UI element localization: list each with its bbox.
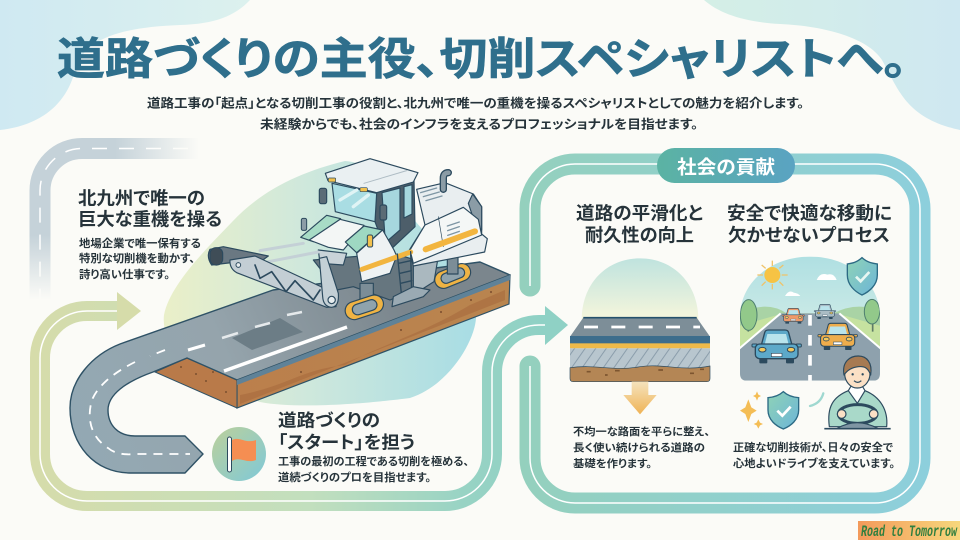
text block: heavy machine	[78, 188, 222, 281]
heading: smoothing and durability: 道路の平滑化と	[576, 202, 703, 224]
heading: safe and comfortable travel	[727, 204, 892, 246]
orange stripe front	[362, 252, 411, 269]
heading pill: 社会の貢献	[677, 156, 775, 178]
text block: start of road building: 道続づくりのプロを目指せます。	[278, 471, 431, 484]
text block: smoothing	[573, 425, 710, 470]
undercarriage	[313, 253, 427, 300]
background blob: top left	[0, 0, 250, 130]
car: orange far	[782, 308, 805, 324]
text block: start of road building	[278, 410, 469, 484]
car: orange near	[818, 323, 857, 350]
car: blue near	[752, 330, 801, 363]
heading: safe and comfortable travel: 欠かせないプロセス	[728, 224, 890, 246]
text block: smoothing: 基礎を作ります。	[573, 457, 652, 470]
lane dashes	[90, 350, 190, 454]
heading: safe and comfortable travel: 安全で快適な移動に	[727, 204, 892, 224]
text block: start of road building: 工事の最初の工程である切削を極める、	[278, 455, 469, 468]
arrowhead: second	[545, 306, 568, 345]
road surface	[70, 262, 510, 473]
motion arc	[810, 393, 823, 406]
car: grey far	[814, 304, 836, 319]
intro text: 道路工事の「起点」となる切削工事の役割と、北九州で唯一の重機を操るスペシャリストとしての魅力を紹介します。	[147, 96, 804, 110]
heading: smoothing and durability: 耐久性の向上	[585, 226, 694, 246]
front hood	[301, 215, 341, 242]
cab roof	[325, 159, 418, 193]
icon: driver	[824, 356, 891, 429]
text block: precise cutting	[733, 441, 895, 470]
engine housing	[409, 183, 487, 266]
orange stripe rear	[426, 231, 475, 249]
exhaust	[443, 173, 448, 189]
icon: sun	[757, 261, 788, 289]
text block: smoothing: 長く使い続けられる道路の	[573, 441, 705, 454]
icon: shield top	[847, 258, 877, 295]
conveyor	[208, 243, 338, 307]
icon: sparkles	[740, 391, 763, 429]
intro text: 未経験からでも、社会のインフラを支えるプロフェッショナルを目指せます。	[260, 116, 698, 132]
text block: precise cutting: 心地よいドライブを支えています。	[733, 457, 895, 470]
text block: smoothing: 不均一な路面を平らに整え、	[573, 425, 710, 438]
text block: heavy machine: 地場企業で唯一保有する	[79, 236, 201, 250]
text block: heavy machine: 詩り高い仕事です。	[79, 267, 170, 281]
diagram: road cross-section	[570, 258, 710, 414]
text block: precise cutting: 正確な切削技術が、日々の安全で	[733, 441, 893, 454]
kerb	[237, 275, 510, 385]
icon: start flag	[212, 427, 266, 481]
intro text	[147, 96, 804, 132]
cab	[319, 159, 418, 253]
milling machine	[208, 159, 487, 322]
front track	[343, 283, 386, 322]
text block: start of road building: 道路づくりの	[278, 410, 380, 430]
text block: start of road building: 「スタート」を担う	[278, 432, 415, 452]
road frame: faded grey road top left	[24, 134, 220, 307]
background blob: top right	[704, 0, 960, 130]
illustration: safe drive scene	[737, 253, 891, 429]
centre line	[224, 327, 347, 371]
title: 道路づくりの主役、切削スペシャリストへ。	[57, 35, 907, 84]
text block: heavy machine: 特別な切削機を動かす、	[79, 251, 195, 265]
icon: shield bottom	[768, 392, 799, 429]
text block: heavy machine: 北九州で唯一の	[78, 188, 205, 208]
milled patch	[232, 318, 303, 350]
text block: heavy machine: 巨大な重機を操る	[78, 210, 222, 230]
soil side faces	[237, 275, 510, 408]
arrow path: olive to teal flow	[40, 292, 568, 501]
social contribution frame	[530, 164, 920, 503]
blob behind machine	[164, 161, 476, 405]
ladder	[397, 252, 412, 297]
heading pill	[657, 148, 795, 183]
heading: smoothing and durability	[576, 202, 703, 246]
rear track	[432, 250, 473, 291]
arrowhead: first	[117, 292, 141, 330]
arrow: down	[623, 382, 657, 414]
road slab with U-turn	[70, 262, 510, 473]
